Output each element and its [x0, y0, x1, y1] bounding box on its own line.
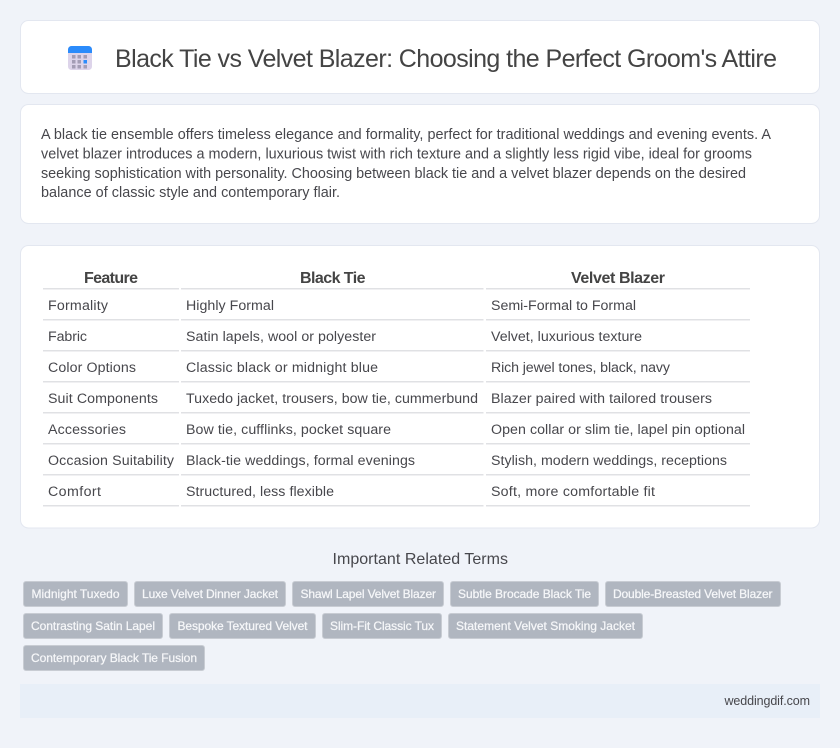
- tag: [134, 582, 286, 606]
- table row: Comfort: Comfort: [48, 484, 101, 500]
- tag: [24, 582, 128, 606]
- tag: [322, 614, 442, 638]
- table row: Formality: Formality: [48, 298, 109, 314]
- text block: summary paragraph: [41, 127, 771, 201]
- tag: [450, 582, 598, 606]
- text block: summary paragraph: balance of classic style and contemporary flair.: [41, 185, 340, 201]
- tag: Shawl Lapel Velvet Blazer: [300, 587, 436, 601]
- tag: [606, 582, 780, 606]
- table row: Color Options: Color Options: [48, 360, 136, 376]
- tag: [448, 614, 642, 638]
- panel: summary: [20, 104, 820, 224]
- table header: Feature: [84, 270, 138, 287]
- tag: [292, 582, 444, 606]
- table row: Suit Components: Tuxedo jacket, trousers, bow tie, cummerbund: [186, 391, 478, 407]
- table row: Fabric: Fabric: [48, 329, 87, 345]
- text block: summary paragraph: A black tie ensemble offers timeless elegance and formality, perfect for traditional weddings and evening events. A: [41, 127, 771, 143]
- table row: Fabric: Satin lapels, wool or polyester: [186, 329, 376, 345]
- table row: Comfort: [43, 484, 750, 506]
- table row: Formality: Semi-Formal to Formal: [491, 298, 636, 314]
- table header: Velvet Blazer: [571, 270, 665, 287]
- text block: summary paragraph: velvet blazer introduces a modern, luxurious twist with rich texture and a slightly less rigid vibe, ideal for grooms: [41, 146, 752, 162]
- table row: Occasion Suitability: Occasion Suitability: [48, 453, 175, 469]
- table row: Accessories: Bow tie, cufflinks, pocket square: [186, 422, 391, 438]
- panel: comparison table: [20, 246, 820, 528]
- tag: [24, 646, 204, 670]
- table row: Suit Components: Suit Components: [48, 391, 158, 407]
- tag: Slim-Fit Classic Tux: [330, 619, 434, 633]
- tag: Contemporary Black Tie Fusion: [31, 651, 197, 665]
- table row: Fabric: [43, 329, 750, 352]
- table row: Fabric: Velvet, luxurious texture: [491, 329, 642, 345]
- tag: Double-Breasted Velvet Blazer: [613, 587, 772, 601]
- table row: Color Options: [43, 360, 750, 382]
- table row: Formality: Highly Formal: [186, 298, 274, 314]
- table row: Accessories: Accessories: [48, 422, 126, 438]
- tag: Contrasting Satin Lapel: [31, 619, 155, 633]
- table row: Occasion Suitability: Black-tie weddings, formal evenings: [186, 453, 415, 469]
- footer source: weddingdif.com: [724, 694, 810, 708]
- tag: Statement Velvet Smoking Jacket: [456, 619, 636, 633]
- heading: related terms: Important Related Terms: [332, 551, 508, 568]
- title: Black Tie vs Velvet Blazer: Choosing the Perfect Groom's Attire: [115, 45, 777, 73]
- table row: Suit Components: Blazer paired with tailored trousers: [491, 391, 712, 407]
- related terms tags: [24, 582, 780, 670]
- table header: [43, 270, 750, 290]
- tag: Luxe Velvet Dinner Jacket: [142, 587, 279, 601]
- footer bar: [20, 684, 820, 718]
- table row: Comfort: Structured, less flexible: [186, 484, 334, 500]
- header panel: [20, 20, 820, 94]
- table row: Formality: [43, 298, 750, 320]
- tag: Midnight Tuxedo: [32, 587, 120, 601]
- table row: Accessories: Open collar or slim tie, lapel pin optional: [491, 422, 745, 438]
- table row: Comfort: Soft, more comfortable fit: [491, 484, 655, 500]
- table row: Occasion Suitability: [43, 453, 750, 476]
- tag: [170, 614, 316, 638]
- table row: Color Options: Classic black or midnight blue: [186, 360, 378, 376]
- table row: Accessories: [43, 422, 750, 444]
- table row: Suit Components: [43, 391, 750, 414]
- text block: summary paragraph: seeking sophistication with personality. Choosing between black tie and a velvet blazer depends on the desired: [41, 166, 746, 182]
- table row: Color Options: Rich jewel tones, black, navy: [491, 360, 671, 376]
- table row: Occasion Suitability: Stylish, modern weddings, receptions: [491, 453, 727, 469]
- table header: Black Tie: [300, 270, 366, 287]
- tag: Bespoke Textured Velvet: [178, 619, 308, 633]
- icon: calendar: [68, 46, 92, 70]
- tag: Subtle Brocade Black Tie: [458, 587, 591, 601]
- tag: [24, 614, 162, 638]
